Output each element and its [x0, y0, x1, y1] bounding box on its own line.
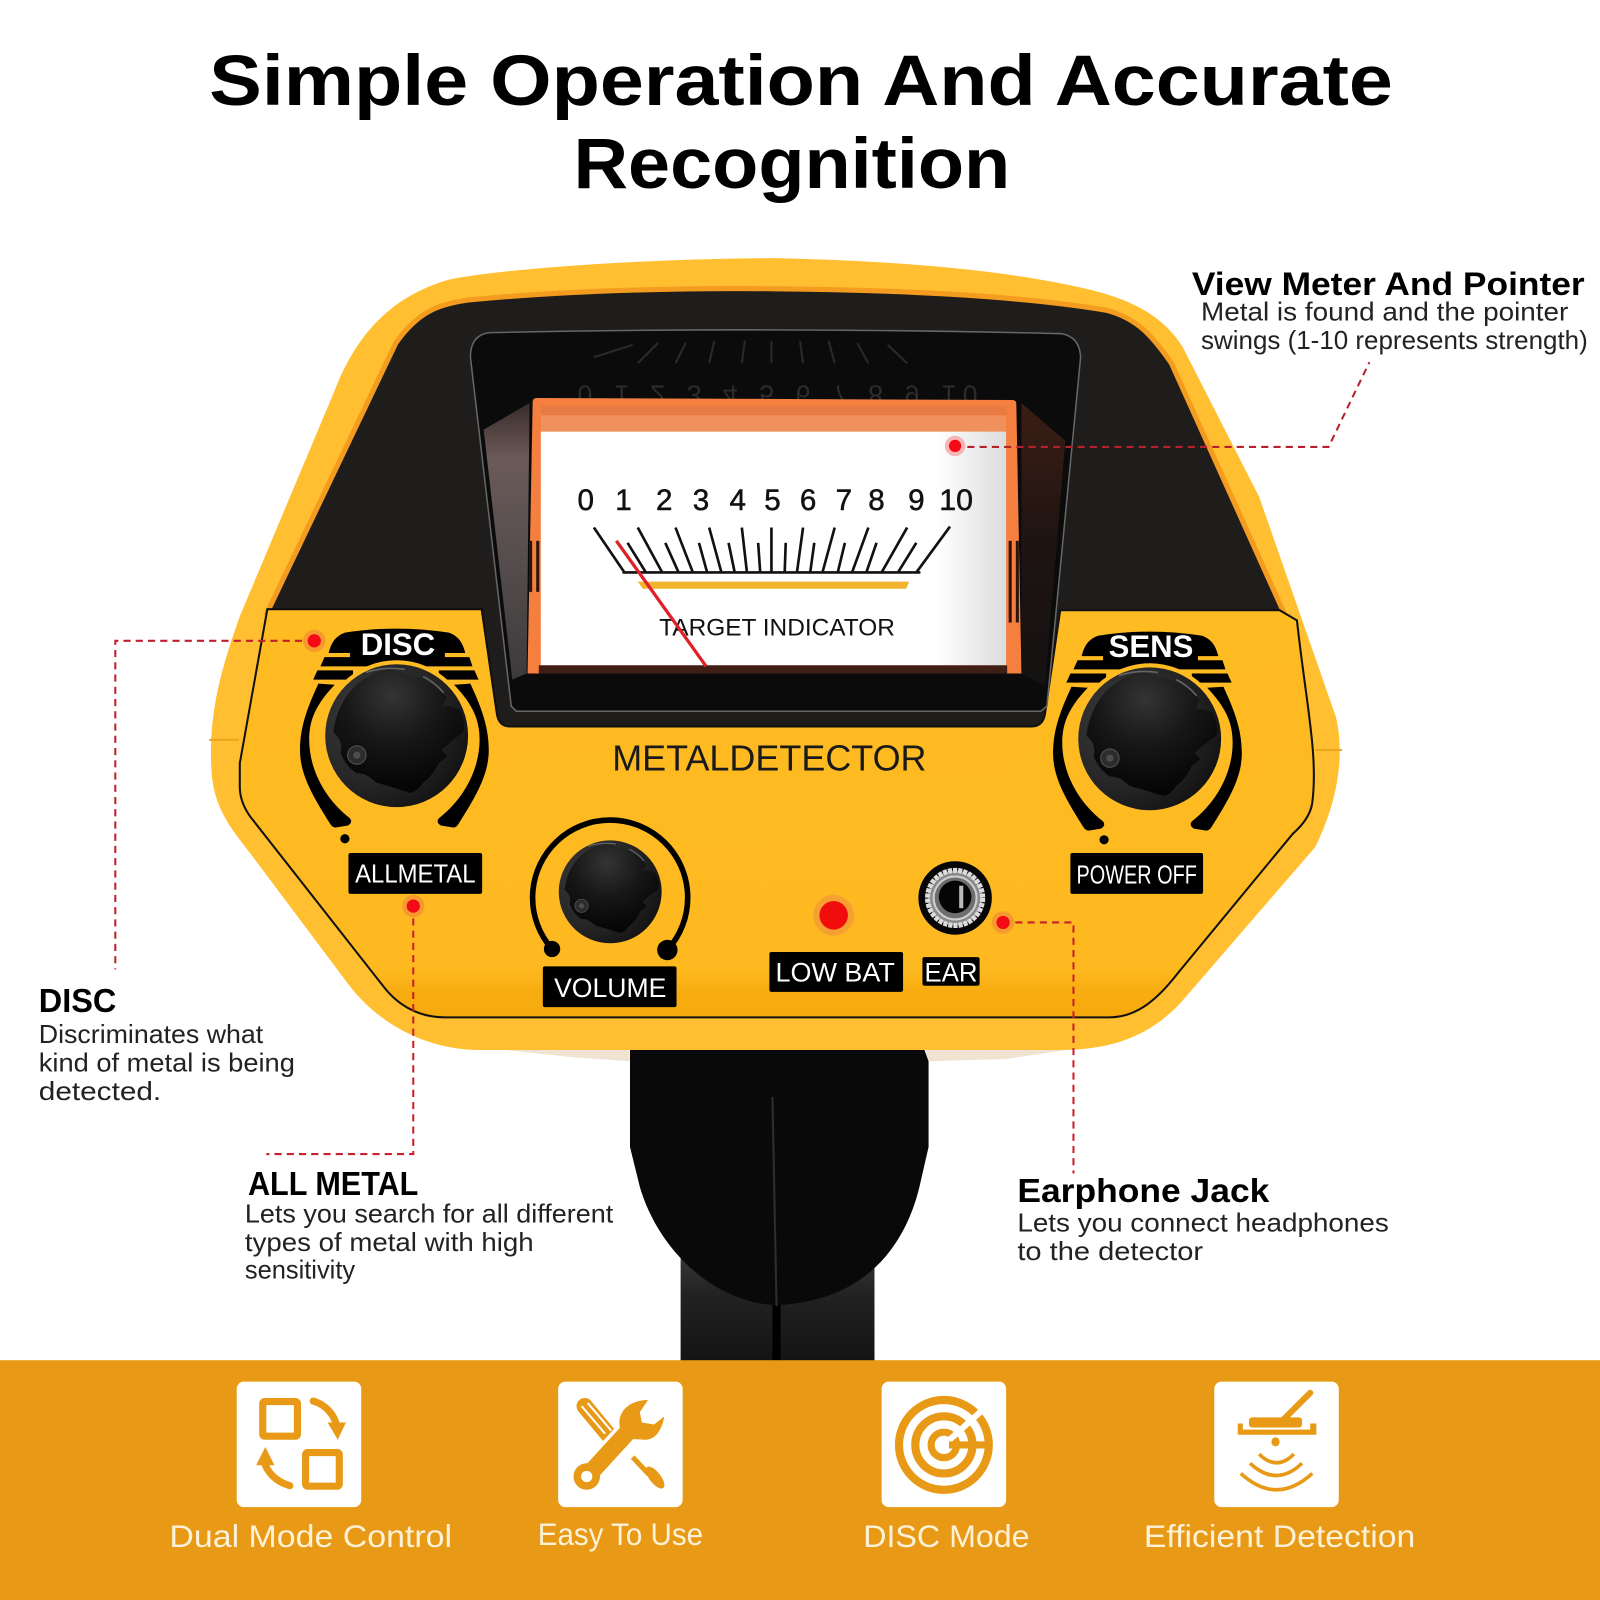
feature: dual mode control: Dual Mode Control [169, 1518, 452, 1554]
mirrored scale reflection [578, 341, 978, 410]
text block: earphone jack: Lets you connect headphones [1017, 1210, 1389, 1238]
analog meter [528, 398, 1021, 673]
label: VOLUME [543, 966, 677, 1007]
detector control box [209, 258, 1342, 1050]
meter recess [470, 330, 1081, 711]
text block: all metal: types of metal with high [245, 1229, 534, 1257]
text block: all metal [245, 1166, 613, 1285]
text block: DISC: detected. [39, 1078, 161, 1106]
callout leader: DISC [115, 630, 326, 969]
DISC dial: DISC [361, 626, 435, 662]
label: LOW BAT: LOW BAT [776, 958, 895, 988]
text block: DISC [39, 983, 295, 1106]
callout leader: earphone jack [992, 911, 1073, 1173]
earphone jack [918, 861, 992, 935]
text block: all metal: Lets you search for all different [245, 1200, 613, 1228]
text block: view meter and pointer: swings (1-10 represents strength) [1201, 327, 1588, 355]
scale numbers: 8 [868, 484, 885, 517]
red needle [616, 541, 706, 666]
panel: feature band [0, 1360, 1600, 1600]
text block: view meter and pointer: Metal is found and the pointer [1201, 298, 1569, 326]
target indicator label: TARGET INDICATOR [659, 615, 895, 642]
DISC dial [300, 626, 489, 843]
feature: easy to use [538, 1382, 703, 1552]
meter bezel [528, 398, 1021, 673]
text block: all metal: sensitivity [245, 1257, 355, 1285]
label: POWER OFF: POWER OFF [1077, 862, 1197, 890]
text block: DISC: kind of metal is being [39, 1049, 295, 1077]
text block: earphone jack [1017, 1173, 1389, 1266]
SENS dial: SENS [1109, 628, 1193, 664]
mirrored scale reflection: 0 1 2 3 4 5 6 7 8 9 10 [578, 380, 978, 410]
text block: view meter and pointer: View Meter And Pointer [1192, 265, 1585, 302]
scale numbers: 3 [693, 484, 709, 517]
label: LOW BAT [769, 952, 903, 992]
feature: easy to use: Easy To Use [538, 1516, 703, 1552]
scale numbers: 9 [908, 484, 925, 517]
feature: dual mode control [169, 1382, 452, 1554]
detector handle [506, 1050, 1066, 1361]
brand label: METALDETECTOR [612, 738, 927, 778]
scale numbers [577, 484, 973, 517]
scale numbers: 2 [656, 484, 673, 517]
scale numbers: 1 [615, 484, 632, 517]
text block: earphone jack: to the detector [1017, 1238, 1204, 1266]
feature: disc mode: DISC Mode [863, 1518, 1030, 1554]
title: Simple Operation And Accurate [209, 41, 1393, 121]
yellow arc bar [638, 582, 909, 589]
scale numbers: 7 [836, 484, 852, 517]
title: Recognition [573, 124, 1010, 204]
callout leader: ALL METAL [266, 895, 424, 1154]
feature: efficient detection [1144, 1382, 1415, 1554]
label: ALLMETAL [348, 853, 482, 894]
yellow housing [211, 258, 1340, 1050]
text block: DISC: DISC [39, 983, 116, 1020]
black upper panel [267, 289, 1284, 612]
label: POWER OFF [1070, 853, 1203, 894]
text block: view meter and pointer [1192, 265, 1588, 355]
label: EAR: EAR [924, 958, 978, 988]
callout leader: meter [945, 362, 1369, 456]
text block: earphone jack: Earphone Jack [1017, 1173, 1270, 1210]
scale numbers: 4 [730, 484, 746, 517]
text block: DISC: Discriminates what [39, 1021, 263, 1049]
scale numbers: 10 [939, 484, 973, 517]
volume dial [533, 820, 688, 960]
low battery LED [813, 895, 854, 936]
feature: disc mode [863, 1382, 1030, 1554]
feature: efficient detection: Efficient Detection [1144, 1518, 1415, 1554]
yellow control panel [240, 609, 1314, 1017]
label: ALLMETAL: ALLMETAL [355, 861, 476, 889]
scale numbers: 6 [800, 484, 816, 517]
text block: all metal: ALL METAL [248, 1166, 418, 1203]
scale numbers: 0 [577, 484, 594, 517]
label: VOLUME: VOLUME [554, 973, 666, 1003]
scale numbers: 5 [764, 484, 781, 517]
meter face [541, 432, 1006, 665]
title [209, 41, 1393, 204]
scale ticks [594, 527, 950, 572]
SENS dial [1053, 628, 1242, 844]
